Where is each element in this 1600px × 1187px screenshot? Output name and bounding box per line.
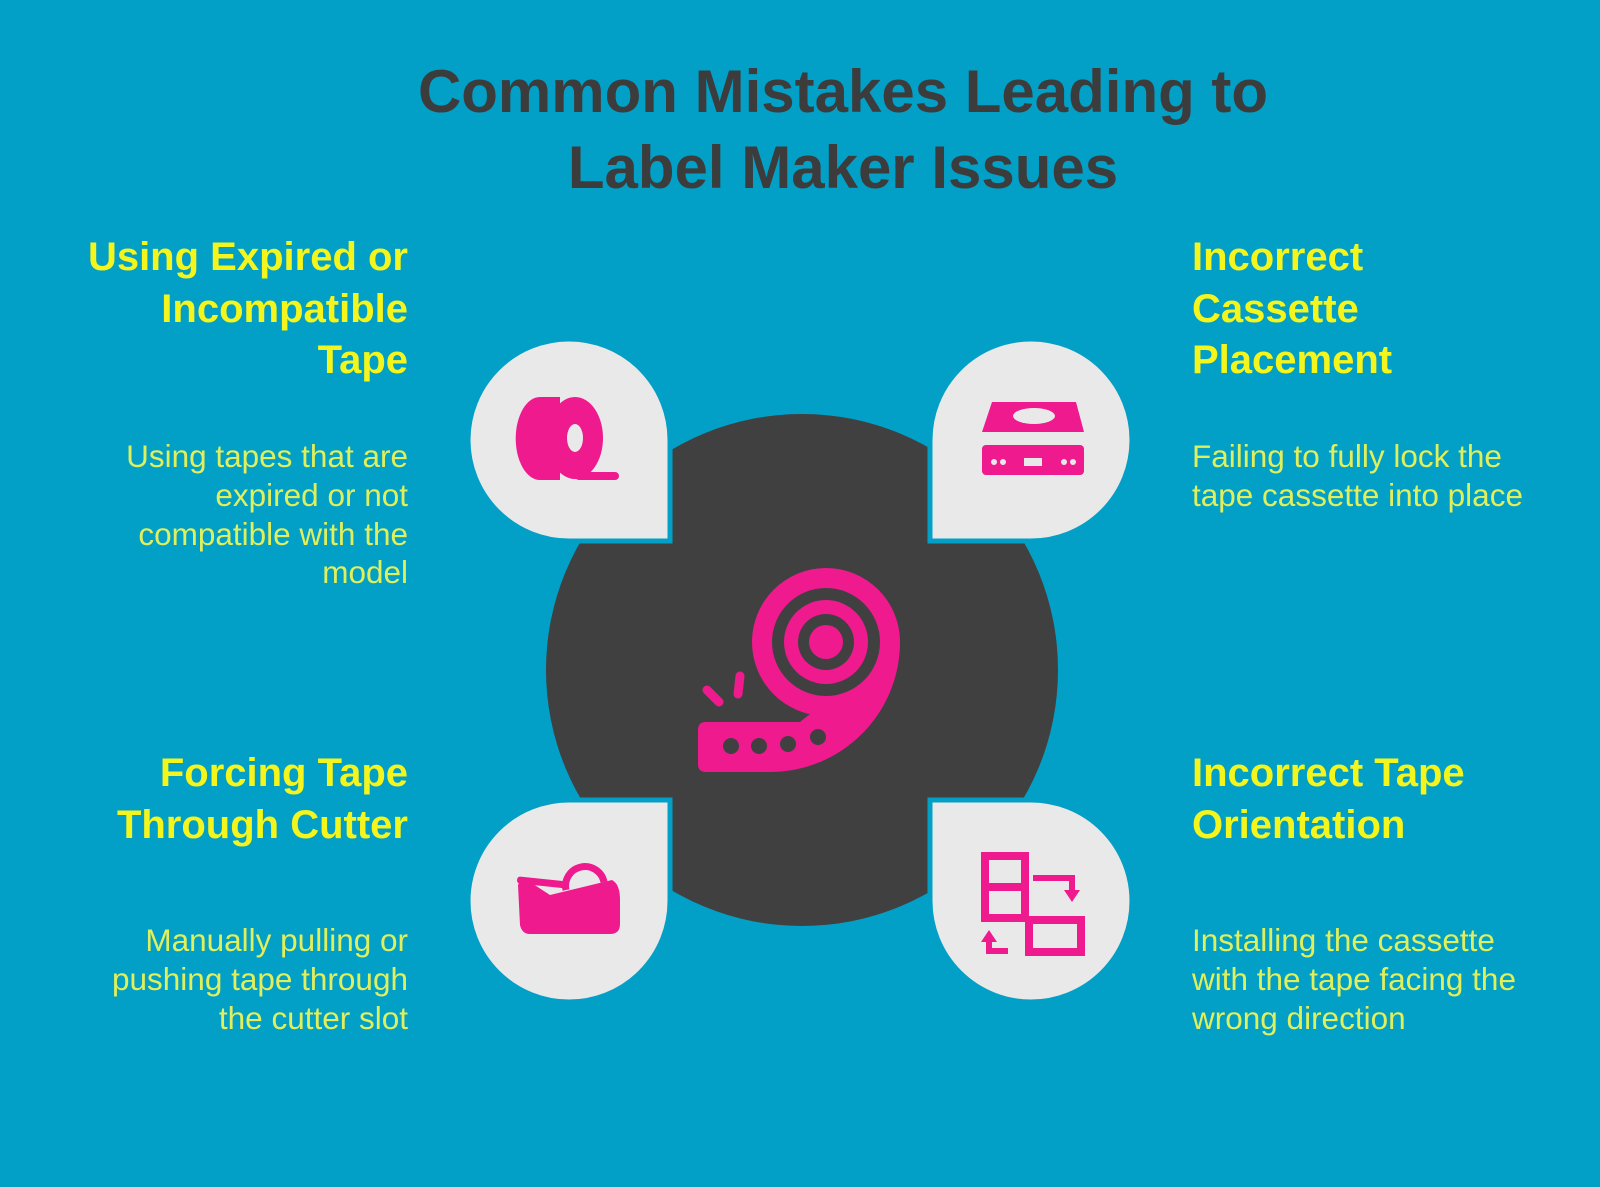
title <box>418 58 1268 201</box>
text: cassette placement: tape cassette into place <box>1192 477 1523 513</box>
heading: cassette placement: Incorrect <box>1192 235 1363 279</box>
heading: orientation: Incorrect Tape <box>1192 751 1465 795</box>
text: forcing tape: Manually pulling or <box>145 922 408 958</box>
center dark circle <box>546 414 1058 926</box>
heading: orientation <box>1192 751 1465 846</box>
text: orientation: with the tape facing the <box>1192 961 1516 997</box>
title: Label Maker Issues <box>568 134 1118 201</box>
text: expired tape <box>126 438 408 590</box>
icon: orientation <box>985 856 1081 952</box>
icon: tape dispenser <box>517 867 620 934</box>
text: cassette placement: Failing to fully lock the <box>1192 438 1502 474</box>
icon: cassette <box>982 402 1084 475</box>
bubble: top-left <box>468 339 670 541</box>
bubble: bottom-right <box>930 800 1132 1002</box>
heading: forcing tape <box>117 751 408 846</box>
text: forcing tape: the cutter slot <box>219 1000 408 1036</box>
bubble: bottom-left <box>468 800 670 1002</box>
text: orientation <box>1192 922 1516 1036</box>
heading: cassette placement: Cassette <box>1192 286 1359 330</box>
heading: expired tape: Tape <box>318 338 408 382</box>
bubble: top-right <box>930 339 1132 541</box>
text: orientation: Installing the cassette <box>1192 922 1495 958</box>
text: expired tape: expired or not <box>215 477 408 513</box>
text: expired tape: Using tapes that are <box>126 438 408 474</box>
heading: forcing tape: Forcing Tape <box>160 751 408 795</box>
heading: orientation: Orientation <box>1192 802 1405 846</box>
heading: cassette placement: Placement <box>1192 338 1392 382</box>
text: expired tape: model <box>322 554 408 590</box>
heading: expired tape: Using Expired or <box>88 235 408 279</box>
text: orientation: wrong direction <box>1192 1000 1406 1036</box>
text: expired tape: compatible with the <box>138 516 408 552</box>
heading: expired tape: Incompatible <box>161 286 408 330</box>
icon: center tape roll <box>698 568 900 772</box>
heading: cassette placement <box>1192 235 1392 382</box>
title: Common Mistakes Leading to <box>418 58 1268 125</box>
icon: tape roll <box>516 397 619 480</box>
text: forcing tape <box>112 922 408 1036</box>
heading: forcing tape: Through Cutter <box>117 802 408 846</box>
text: forcing tape: pushing tape through <box>112 961 408 997</box>
heading: expired tape <box>88 235 408 382</box>
text: cassette placement <box>1192 438 1523 513</box>
